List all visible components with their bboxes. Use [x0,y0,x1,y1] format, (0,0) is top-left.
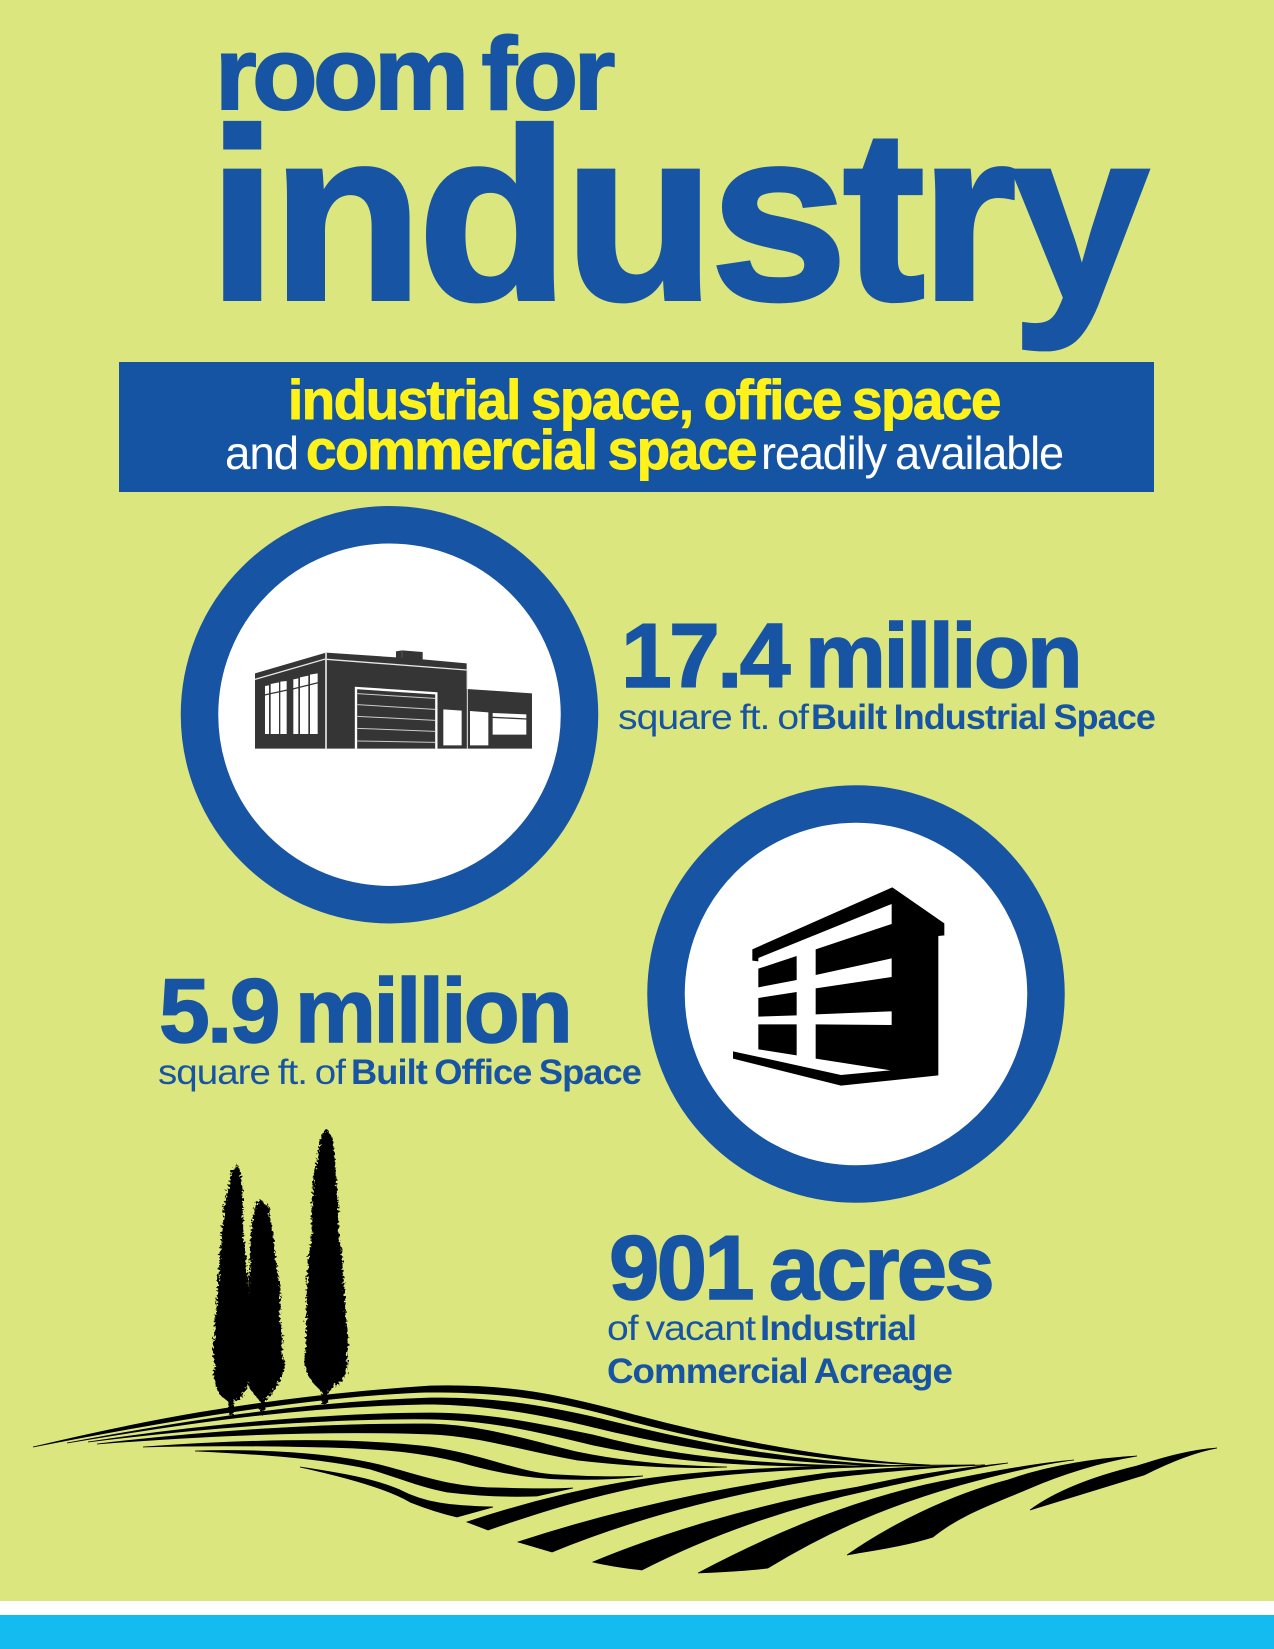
caption: acreage: Commercial Acreage [607,1352,952,1391]
banner [119,362,1154,492]
caption: acreage: Industrial [760,1309,916,1348]
number: 5.9 million: 5.9 million [159,961,570,1062]
title [208,16,1148,351]
caption: industrial: Built Industrial Space [811,698,1155,737]
title line: room for: room for [215,16,614,131]
icon: cypress trees [213,1128,348,1415]
banner line 2: commercial space [306,418,756,481]
icon: office building [733,887,944,1086]
banner line 1: industrial space, office space [288,368,1000,431]
caption: office: square ft. of [158,1053,346,1092]
stat: built office space [158,961,641,1092]
caption: office [158,1053,641,1092]
circle: industrial building [200,525,580,905]
illustration: furrowed fields [33,1386,1217,1573]
banner line 2: and [225,427,298,479]
stat: built industrial space [618,606,1155,737]
title line: industry: industry [208,80,1148,351]
caption: office: Built Office Space [351,1053,641,1092]
number: 901 acres: 901 acres [609,1218,992,1319]
caption: industrial [618,698,1155,737]
banner line 2 [225,418,1063,481]
circle: office building [666,804,1046,1184]
icon: industrial building [255,650,532,749]
stat: vacant acreage [607,1218,992,1391]
caption: acreage: of vacant [607,1309,756,1348]
footer band [0,1601,1274,1649]
caption: acreage [607,1309,952,1391]
banner line 2: readily available [761,427,1063,479]
caption: industrial: square ft. of [618,698,809,737]
number: 17.4 million: 17.4 million [621,606,1080,707]
